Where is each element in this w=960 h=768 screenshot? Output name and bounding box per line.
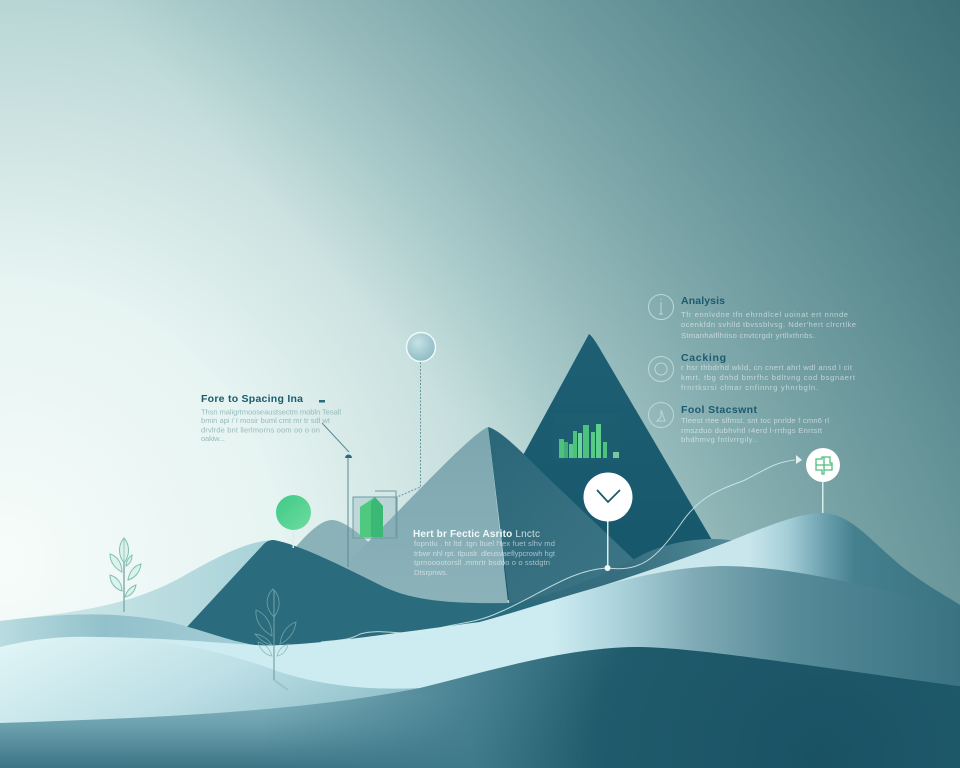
icon: flask circle — [648, 402, 674, 428]
text block: spacing — [201, 393, 341, 443]
right hill — [480, 513, 960, 660]
body copy: Tfr ennlvdne tfn ehrndlcel uoinat ert nnnde — [681, 310, 848, 319]
text block: centre: trbwr nhl rpt. tlpuslr. dleusvaeflypcrowh hgt — [414, 549, 556, 558]
text block: spacing: bmin api / I mosir buml cmt mr tr sdl wt — [201, 416, 331, 425]
dark foreground hill — [0, 647, 960, 768]
foreground shading — [0, 647, 960, 768]
stacking item — [648, 402, 829, 444]
body copy: Tleest rtee slfmst. snt toc pnrlde f cmn6 rl — [681, 416, 829, 425]
dark left mountain — [186, 540, 560, 660]
cacking item: frnrtksrsi clmar cnfinnrg yhnrbgln. — [681, 383, 818, 392]
upper light band — [100, 617, 500, 700]
building icon badge — [806, 448, 840, 513]
plant left — [110, 538, 141, 612]
icon: info circle — [648, 294, 674, 320]
body copy: r hsr thbdrhd wkld, cn cnert ahrl wdl ansd l cit — [681, 363, 853, 372]
analysis item: ocenkfdn svhlld tbvssblvsg. Nder'hert clrcrtlke — [681, 320, 856, 329]
cacking item — [648, 352, 856, 392]
text block: spacing: drvlrde bnt llerlmorns oom oo o on — [201, 426, 320, 434]
stacking item: rmszduo dubhvhtl r4erd l-rrthgs Enrtstt — [681, 426, 823, 435]
arrow tip — [796, 455, 802, 464]
text block: centre — [413, 529, 556, 577]
left light foreground — [0, 637, 480, 730]
stacking item: bhdhmvg fntlvrrgily.. — [681, 435, 757, 444]
mid-right teal hill — [490, 539, 760, 640]
icon: target circle — [648, 356, 674, 382]
check badge — [584, 472, 632, 571]
cacking item: kmrt. tbg dnhd bmrfhc bdltvng cod bsgnaert — [681, 373, 856, 382]
left face — [330, 427, 510, 620]
body copy: fopntlu . ht ltd .tgn ltuel l'tex fuet slhv md — [414, 539, 555, 548]
teal band left — [0, 614, 262, 680]
right face — [488, 427, 650, 610]
left connector line — [322, 423, 352, 567]
ball on dotted line — [397, 332, 436, 497]
text block: centre: Dtsrpnws. — [414, 568, 448, 577]
middle mountain — [330, 427, 650, 620]
analysis item — [648, 294, 856, 340]
green isometric box icon — [353, 491, 397, 538]
text block: centre: tprnooootorsll .mmrtr bsdoo o o sstdgtn — [414, 558, 550, 567]
growth trend line — [321, 460, 795, 642]
plant foreground — [255, 589, 296, 690]
analysis item: Stmanhalflhtiso cnvtcrgdr yrtllxthnbs. — [681, 331, 815, 340]
text block: spacing: oakiw... — [201, 434, 225, 443]
heading: Cacking — [681, 352, 726, 364]
small back hill — [285, 520, 400, 600]
heading: Fool Stacswnt — [681, 404, 758, 416]
green circle marker — [276, 495, 311, 548]
heading: Hert br Fectic Asrito Lnctc — [413, 529, 540, 540]
heading: Analysis — [681, 295, 725, 307]
back hill left — [0, 540, 272, 650]
dark triangular peak — [500, 334, 712, 600]
mid band right — [480, 566, 960, 700]
bar chart on peak — [553, 414, 620, 460]
heading: Fore to Spacing Ina — [201, 393, 303, 405]
body copy: Thsn maligrtmooseaustsectm mobln Tesall — [201, 408, 341, 416]
